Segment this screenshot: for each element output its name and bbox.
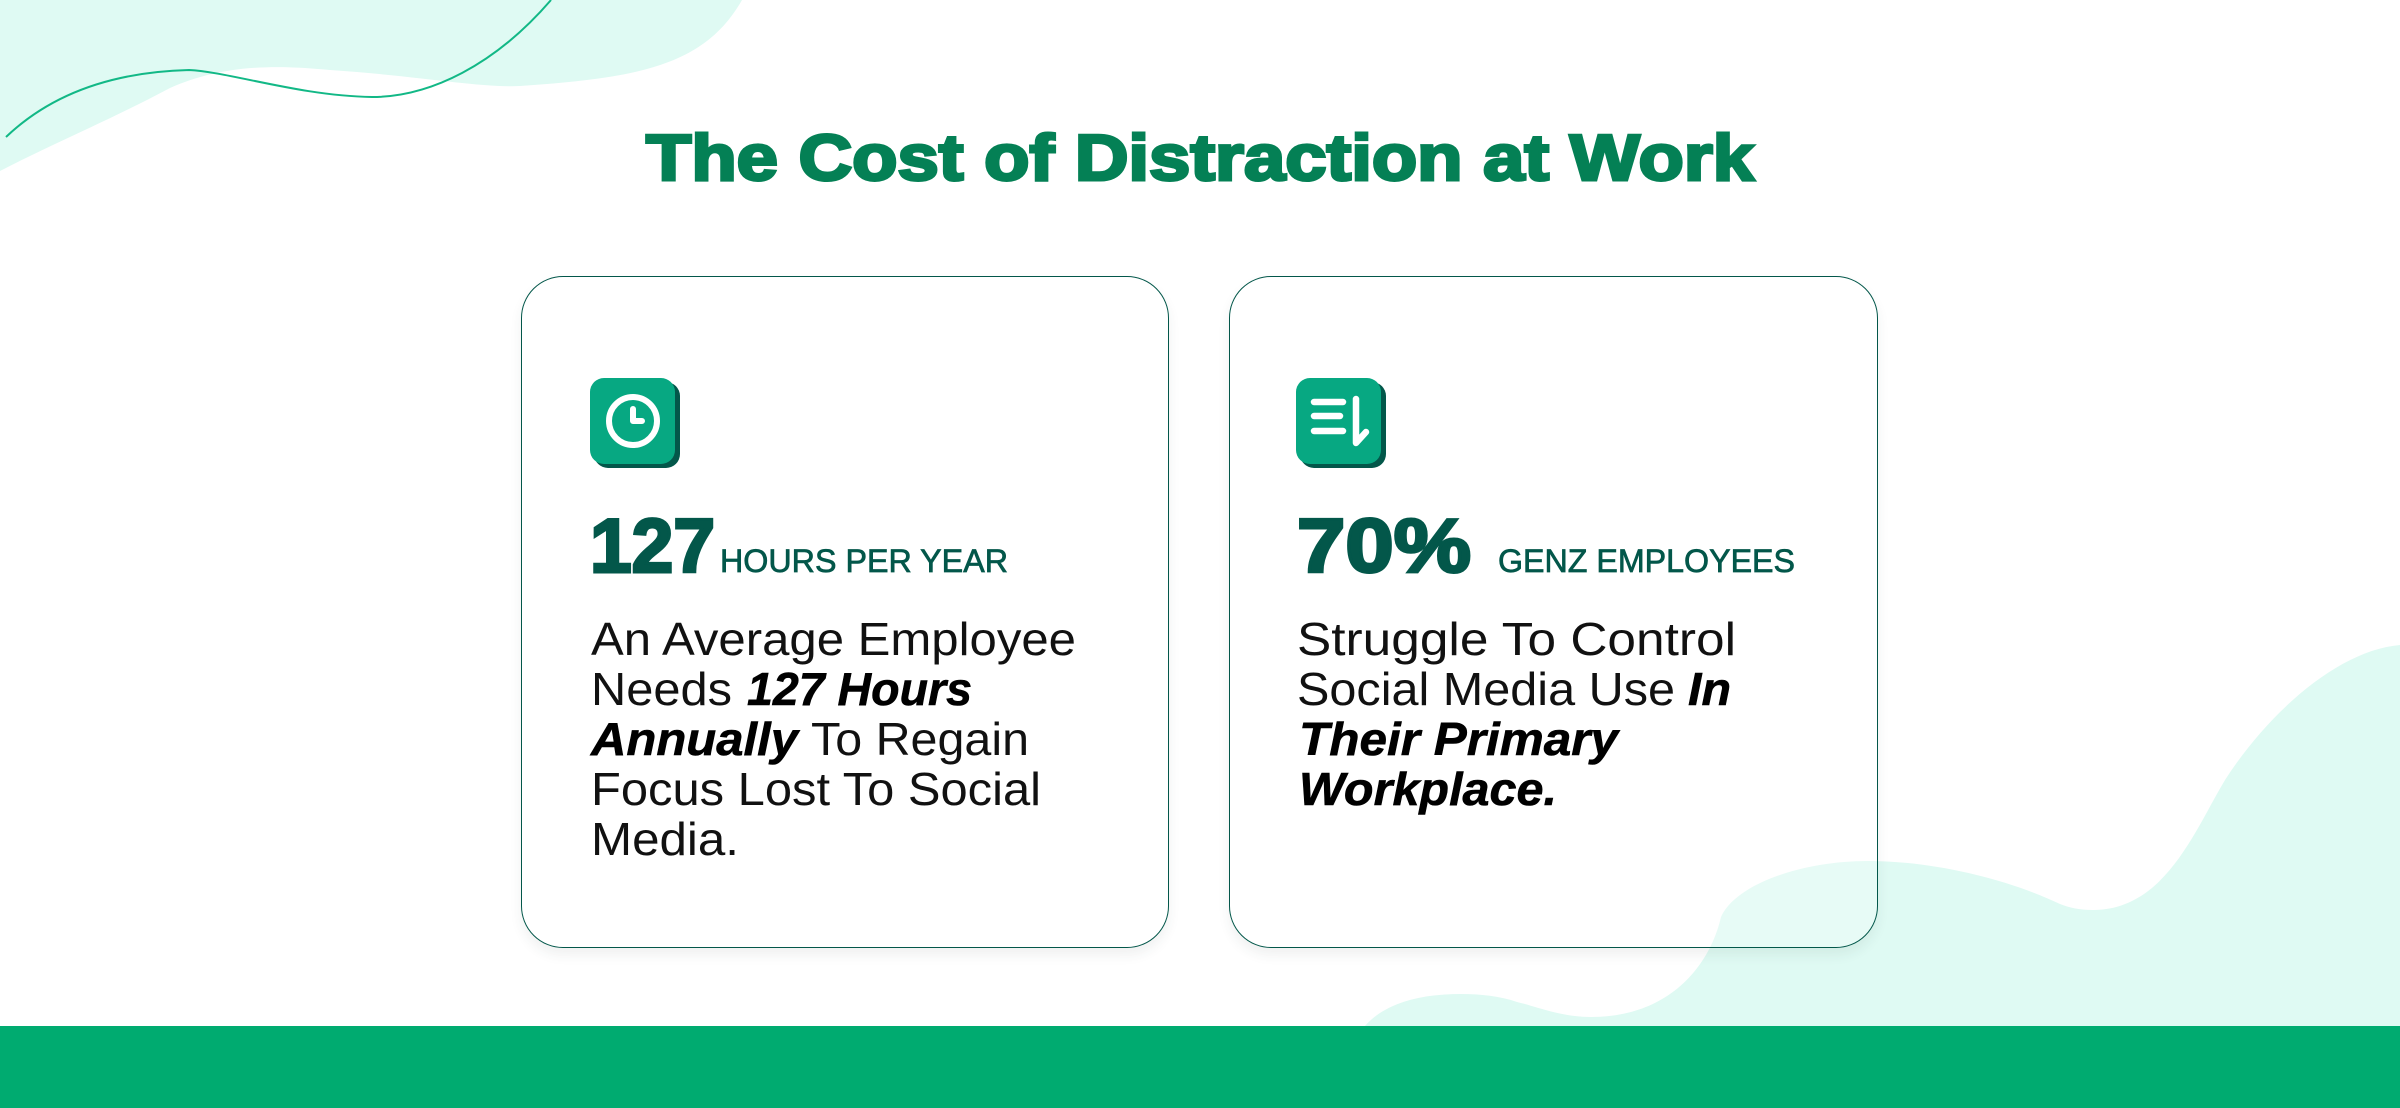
statistic: 127 hours per year: 127 <box>590 504 714 588</box>
text block: description: 127 Hours <box>746 662 972 714</box>
text block: description: Focus Lost To Social <box>590 762 1040 814</box>
text block: description: Social Media Use <box>1296 662 1674 714</box>
icon: sorted list with down arrow <box>1296 378 1386 468</box>
bottom green bar <box>0 1026 2400 1108</box>
text block: description: Their Primary <box>1298 712 1620 764</box>
icon: clock <box>590 378 680 468</box>
text block: description: In <box>1688 662 1730 714</box>
statistic: 70% GenZ employees: 70% <box>1296 504 1470 588</box>
title: The Cost of Distraction at Work <box>646 121 1755 194</box>
panel: 70% GenZ employees <box>1229 276 1878 948</box>
text block: description <box>1296 612 1736 814</box>
text block: description: Annually <box>589 712 800 764</box>
top-left blob <box>0 0 742 171</box>
text block: description: Needs <box>590 662 732 714</box>
text block: description: Struggle To Control <box>1296 612 1736 664</box>
statistic: 127 hours per year: HOURS PER YEAR <box>720 542 1008 578</box>
text block: description: To Regain <box>810 712 1028 764</box>
text block: description <box>589 612 1076 864</box>
statistic: 127 hours per year <box>590 504 1008 588</box>
top-left curve line <box>6 0 551 137</box>
bottom-right blob <box>1365 645 2400 1026</box>
panel: 127 hours per year <box>521 276 1169 948</box>
text block: description: Workplace. <box>1298 762 1556 814</box>
text block: description: Media. <box>590 812 738 864</box>
statistic: 70% GenZ employees <box>1296 504 1794 588</box>
text block: description: An Average Employee <box>590 612 1076 664</box>
statistic: 70% GenZ employees: GENZ EMPLOYEES <box>1498 542 1794 578</box>
